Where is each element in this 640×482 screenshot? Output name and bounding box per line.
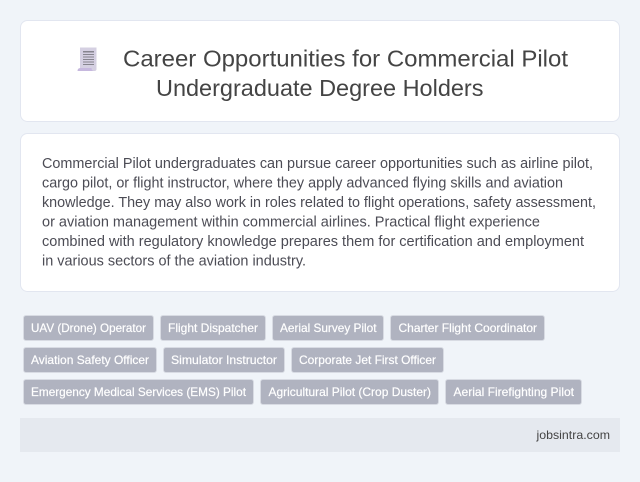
tag: EMS pilot: Emergency Medical Services (EMS) Pilot [31, 385, 247, 399]
tag: aerial firefighting pilot [446, 380, 582, 404]
text block: description: knowledge. They may also work in roles related to flight operations, safety assessment, [42, 195, 596, 211]
tag: UAV operator [24, 316, 154, 340]
tag: flight dispatcher [160, 316, 266, 340]
tag: simulator instructor [164, 348, 284, 372]
text block: description: combined with regulatory knowledge prepares them for certification and employment [42, 234, 584, 250]
heading: Undergraduate Degree Holders [156, 75, 484, 101]
tag: flight dispatcher: Flight Dispatcher [168, 321, 258, 335]
tag: aerial survey pilot [272, 316, 384, 340]
text block: description [42, 156, 596, 270]
heading [123, 46, 569, 101]
text block: description: in various sectors of the aviation industry. [42, 254, 306, 270]
tag: agricultural pilot: Agricultural Pilot (Crop Duster) [268, 385, 431, 399]
tag: corporate jet first officer [292, 348, 444, 372]
tag: aviation safety officer [24, 348, 156, 372]
text block: description: or aviation management within commercial airlines. Practical flight experience [42, 214, 540, 230]
tag: corporate jet first officer: Corporate Jet First Officer [299, 353, 436, 367]
tag: aerial survey pilot: Aerial Survey Pilot [280, 321, 377, 335]
footer bar [20, 418, 620, 452]
text block: description: Commercial Pilot undergraduates can pursue career opportunities such as airline pilot, [42, 156, 593, 172]
tag: charter flight coordinator [390, 316, 544, 340]
tag list [24, 316, 582, 404]
icon: document scroll [78, 48, 96, 71]
tag: EMS pilot [24, 380, 254, 404]
tag: agricultural pilot [260, 380, 438, 404]
panel: description [20, 134, 620, 292]
tag: charter flight coordinator: Charter Flight Coordinator [398, 321, 537, 335]
tag: aerial firefighting pilot: Aerial Firefighting Pilot [454, 385, 575, 399]
footer source text: jobsintra.com [535, 428, 610, 442]
heading: Career Opportunities for Commercial Pilot [123, 46, 569, 72]
text block: description: cargo pilot, or flight instructor, where they apply advanced flying skills and aviation [42, 176, 563, 192]
tag: simulator instructor: Simulator Instructor [171, 353, 277, 367]
tag: UAV operator: UAV (Drone) Operator [31, 321, 146, 335]
panel: header card [20, 20, 620, 122]
tag: aviation safety officer: Aviation Safety Officer [31, 353, 149, 367]
